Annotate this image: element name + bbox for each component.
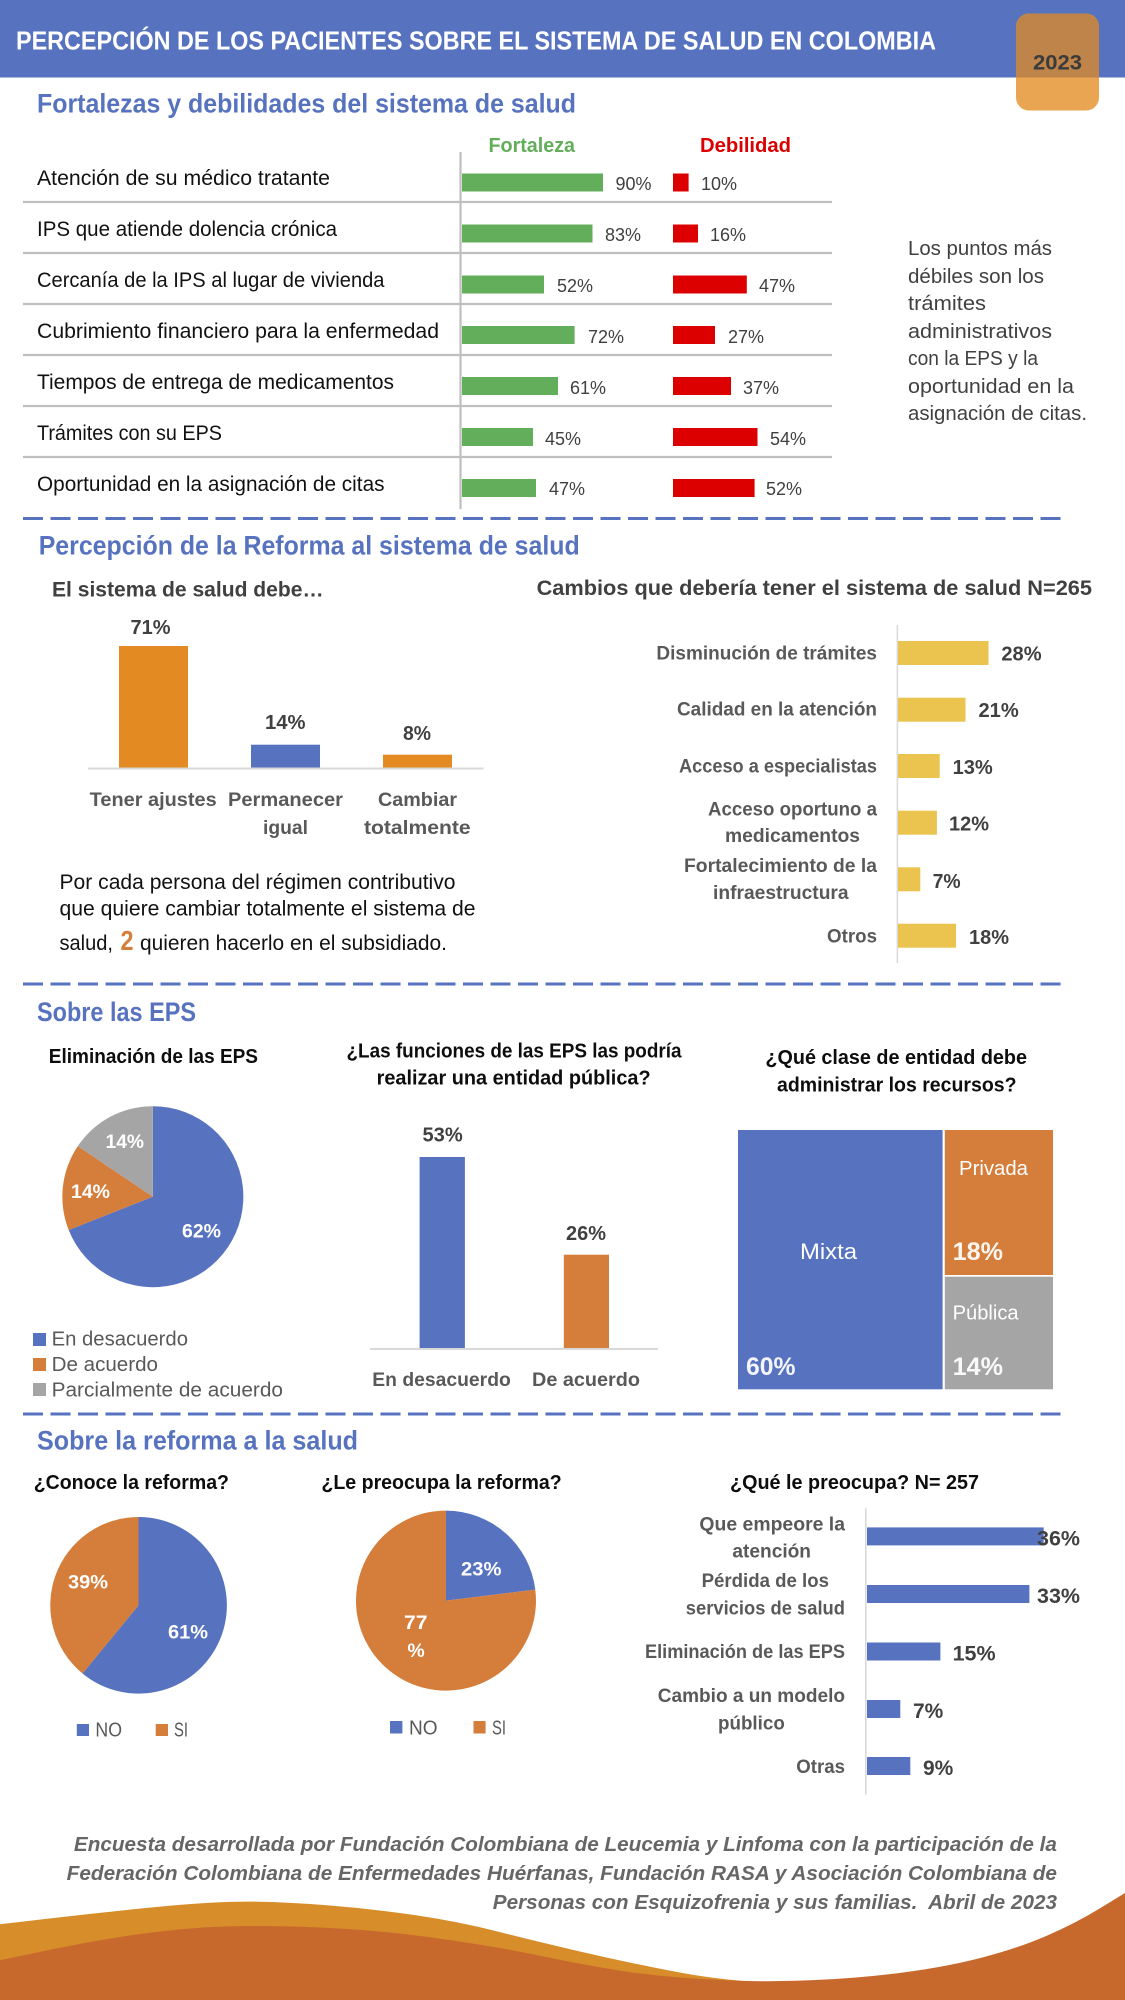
year badge <box>1016 14 1099 110</box>
column chart: el sistema de salud debe: 14% <box>265 712 306 734</box>
callout text <box>60 871 476 956</box>
row: oportunidad <box>37 473 802 499</box>
row: atención médico: 90% <box>616 174 652 194</box>
row: IPS: IPS que atiende dolencia crónica <box>37 218 337 241</box>
row: cubrimiento: 72% <box>588 327 624 347</box>
column chart: entidad pública: En desacuerdo <box>372 1369 511 1391</box>
pie chart: eliminación de las EPS <box>62 1106 243 1287</box>
chart title: ¿Qué clase de entidad debe <box>765 1046 1027 1069</box>
bar chart: qué le preocupa: atención <box>732 1540 811 1562</box>
heading: Fortalezas y debilidades del sistema de salud <box>37 88 576 118</box>
chart title: El sistema de salud debe… <box>52 579 324 602</box>
bar chart: cambios: 21% <box>978 700 1019 722</box>
panel: fortalezas y debilidades <box>23 88 832 509</box>
column header: debilidad: Debilidad <box>700 134 791 157</box>
column chart: el sistema de salud debe: 71% <box>130 617 171 639</box>
bar chart: cambios: Fortalecimiento de la <box>684 855 877 877</box>
row: IPS: 16% <box>710 225 746 245</box>
pie chart: eliminación de las EPS: 14% <box>71 1181 110 1203</box>
row: oportunidad: 52% <box>766 479 802 499</box>
row: cercanía: 52% <box>557 276 593 296</box>
treemap: entidad administradora: Pública <box>953 1301 1019 1324</box>
panel: sobre la reforma <box>34 1426 1080 1794</box>
legend: preocupa: SI <box>492 1717 506 1739</box>
bar chart: cambios: 28% <box>1001 644 1042 666</box>
side note: con la EPS y la <box>908 347 1039 370</box>
side note <box>908 237 1087 425</box>
legend: eliminación: De acuerdo <box>52 1354 158 1376</box>
side note: trámites <box>908 292 986 315</box>
row: trámites: 54% <box>770 429 806 449</box>
callout text: salud, <box>60 932 113 955</box>
column chart: el sistema de salud debe: Cambiar <box>378 789 457 811</box>
row: trámites: 45% <box>545 429 581 449</box>
legend: eliminación: En desacuerdo <box>52 1329 188 1351</box>
source note: Federación Colombiana de Enfermedades Huérfanas, Fundación RASA y Asociación Colombiana de <box>67 1862 1057 1885</box>
source note: Encuesta desarrollada por Fundación Colombiana de Leucemia y Linfoma con la participación de la <box>74 1833 1057 1856</box>
row: trámites <box>37 422 806 449</box>
row: atención médico: 10% <box>701 174 737 194</box>
row: IPS: 83% <box>605 225 641 245</box>
chart title: Cambios que debería tener el sistema de salud N=265 <box>537 577 1092 600</box>
bar chart: cambios: Acceso oportuno a <box>708 799 877 821</box>
footer wave: dark orange <box>0 1893 1125 2000</box>
side note: administrativos <box>908 320 1052 343</box>
row: cercanía: 47% <box>759 276 795 296</box>
row: oportunidad: 47% <box>549 479 585 499</box>
bar chart: cambios: Disminución de trámites <box>656 643 877 665</box>
bar chart: cambios: 7% <box>933 871 961 893</box>
bar chart: cambios: Otros <box>827 926 877 948</box>
bar chart: cambios: Acceso a especialistas <box>679 756 877 778</box>
bar chart: cambios: 13% <box>953 757 993 779</box>
row: cubrimiento: 27% <box>728 327 764 347</box>
row: tiempos <box>37 371 779 398</box>
row: cercanía: Cercanía de la IPS al lugar de vivienda <box>37 269 385 292</box>
bar chart: qué le preocupa: Que empeore la <box>699 1513 845 1535</box>
bar chart: qué le preocupa: 9% <box>923 1756 953 1780</box>
pie chart: conoce la reforma <box>50 1517 227 1694</box>
column chart: el sistema de salud debe <box>88 617 484 839</box>
legend: conoce <box>77 1720 188 1742</box>
side note: asignación de citas. <box>908 402 1087 425</box>
legend: preocupa <box>390 1717 506 1739</box>
legend: conoce: SI <box>174 1720 188 1742</box>
pie chart: eliminación de las EPS: 14% <box>106 1131 144 1153</box>
chart title: realizar una entidad pública? <box>377 1067 651 1090</box>
bar chart: cambios: Calidad en la atención <box>677 699 877 721</box>
bar chart: qué le preocupa: 33% <box>1037 1584 1080 1608</box>
bar chart: cambios: medicamentos <box>725 825 860 847</box>
legend: preocupa: NO <box>409 1717 438 1739</box>
column chart: entidad pública <box>370 1125 658 1391</box>
chart title: ¿Las funciones de las EPS las podría <box>346 1040 682 1063</box>
treemap: entidad administradora: 14% <box>953 1353 1003 1381</box>
pie chart: le preocupa <box>356 1511 536 1691</box>
heading: Sobre las EPS <box>37 997 196 1027</box>
chart title: ¿Conoce la reforma? <box>34 1471 229 1494</box>
treemap: entidad administradora: 60% <box>746 1353 796 1381</box>
row: trámites: Trámites con su EPS <box>37 422 222 445</box>
pie chart: conoce la reforma: 39% <box>68 1572 108 1594</box>
column chart: entidad pública: 26% <box>566 1223 606 1245</box>
panel: sobre las EPS <box>33 997 1053 1402</box>
column chart: el sistema de salud debe: 8% <box>403 723 431 745</box>
header banner <box>0 0 1125 78</box>
chart title: Eliminación de las EPS <box>49 1045 258 1068</box>
column chart: el sistema de salud debe: totalmente <box>364 817 471 839</box>
bar chart: qué le preocupa: 36% <box>1037 1526 1080 1550</box>
row: cubrimiento: Cubrimiento financiero para la enfermedad <box>37 320 439 343</box>
pie chart: le preocupa: 77 <box>404 1612 428 1634</box>
source note: Personas con Esquizofrenia y sus familias. Abril de 2023 <box>493 1891 1058 1914</box>
panel: percepción de la reforma <box>39 531 1092 963</box>
row: tiempos: Tiempos de entrega de medicamentos <box>37 371 394 394</box>
row: IPS <box>37 218 746 245</box>
bar chart: qué le preocupa: 7% <box>913 1699 943 1723</box>
footer wave: light orange <box>0 1902 760 2000</box>
callout text: 2 <box>120 925 134 956</box>
bar chart: cambios <box>656 625 1042 963</box>
chart title: ¿Qué le preocupa? N= 257 <box>730 1471 979 1494</box>
chart title: ¿Le preocupa la reforma? <box>321 1471 562 1494</box>
bar chart: qué le preocupa <box>645 1508 1080 1794</box>
side note: Los puntos más <box>908 237 1052 260</box>
heading: Sobre la reforma a la salud <box>37 1426 358 1456</box>
treemap: entidad administradora: 18% <box>953 1238 1003 1266</box>
treemap: entidad administradora <box>738 1130 1053 1389</box>
legend: eliminación: Parcialmente de acuerdo <box>52 1380 283 1402</box>
bar chart: qué le preocupa: Eliminación de las EPS <box>645 1641 845 1663</box>
source note <box>67 1833 1058 1914</box>
row: atención médico <box>37 167 737 194</box>
bar chart: qué le preocupa: 15% <box>953 1642 996 1666</box>
bar chart: cambios: 18% <box>969 927 1009 949</box>
bar chart: qué le preocupa: Cambio a un modelo <box>658 1685 845 1707</box>
chart title: administrar los recursos? <box>777 1074 1016 1097</box>
pie chart: le preocupa: 23% <box>461 1558 501 1580</box>
column chart: el sistema de salud debe: igual <box>263 817 308 839</box>
row: atención médico: Atención de su médico tratante <box>37 167 330 190</box>
row: tiempos: 37% <box>743 378 779 398</box>
pie chart: le preocupa: % <box>408 1640 425 1662</box>
row: tiempos: 61% <box>570 378 606 398</box>
bar chart: qué le preocupa: público <box>718 1712 785 1734</box>
row: cubrimiento <box>37 320 764 347</box>
legend: eliminación <box>33 1329 283 1402</box>
column chart: el sistema de salud debe: Tener ajustes <box>90 789 217 811</box>
side note: oportunidad en la <box>908 375 1075 398</box>
treemap: entidad administradora: Mixta <box>800 1239 858 1264</box>
callout text: que quiere cambiar totalmente el sistema de <box>60 898 476 921</box>
bar chart: qué le preocupa: Otras <box>796 1756 845 1778</box>
pie chart: conoce la reforma: 61% <box>168 1622 208 1644</box>
bar chart: cambios: infraestructura <box>713 882 849 904</box>
column chart: entidad pública: De acuerdo <box>532 1369 640 1391</box>
chart title <box>765 1046 1027 1097</box>
callout text: quieren hacerlo en el subsidiado. <box>140 932 447 955</box>
bar chart: qué le preocupa: Pérdida de los <box>702 1570 829 1592</box>
year badge: 2023 <box>1033 50 1082 74</box>
row: oportunidad: Oportunidad en la asignación de citas <box>37 473 384 496</box>
row: cercanía <box>37 269 795 296</box>
bar chart: cambios: 12% <box>949 814 989 836</box>
title: PERCEPCIÓN DE LOS PACIENTES SOBRE EL SISTEMA DE SALUD EN COLOMBIA <box>16 26 936 56</box>
pie chart: eliminación de las EPS: 62% <box>182 1221 221 1243</box>
side note: débiles son los <box>908 265 1044 288</box>
column header: fortaleza: Fortaleza <box>488 134 576 157</box>
bar chart: qué le preocupa: servicios de salud <box>686 1597 845 1619</box>
column chart: entidad pública: 53% <box>422 1125 463 1147</box>
chart title <box>346 1040 682 1090</box>
legend: conoce: NO <box>95 1720 122 1742</box>
treemap: entidad administradora: Privada <box>959 1157 1029 1180</box>
column chart: el sistema de salud debe: Permanecer <box>228 789 343 811</box>
heading: Percepción de la Reforma al sistema de salud <box>39 531 580 561</box>
callout text: Por cada persona del régimen contributivo <box>60 871 456 894</box>
